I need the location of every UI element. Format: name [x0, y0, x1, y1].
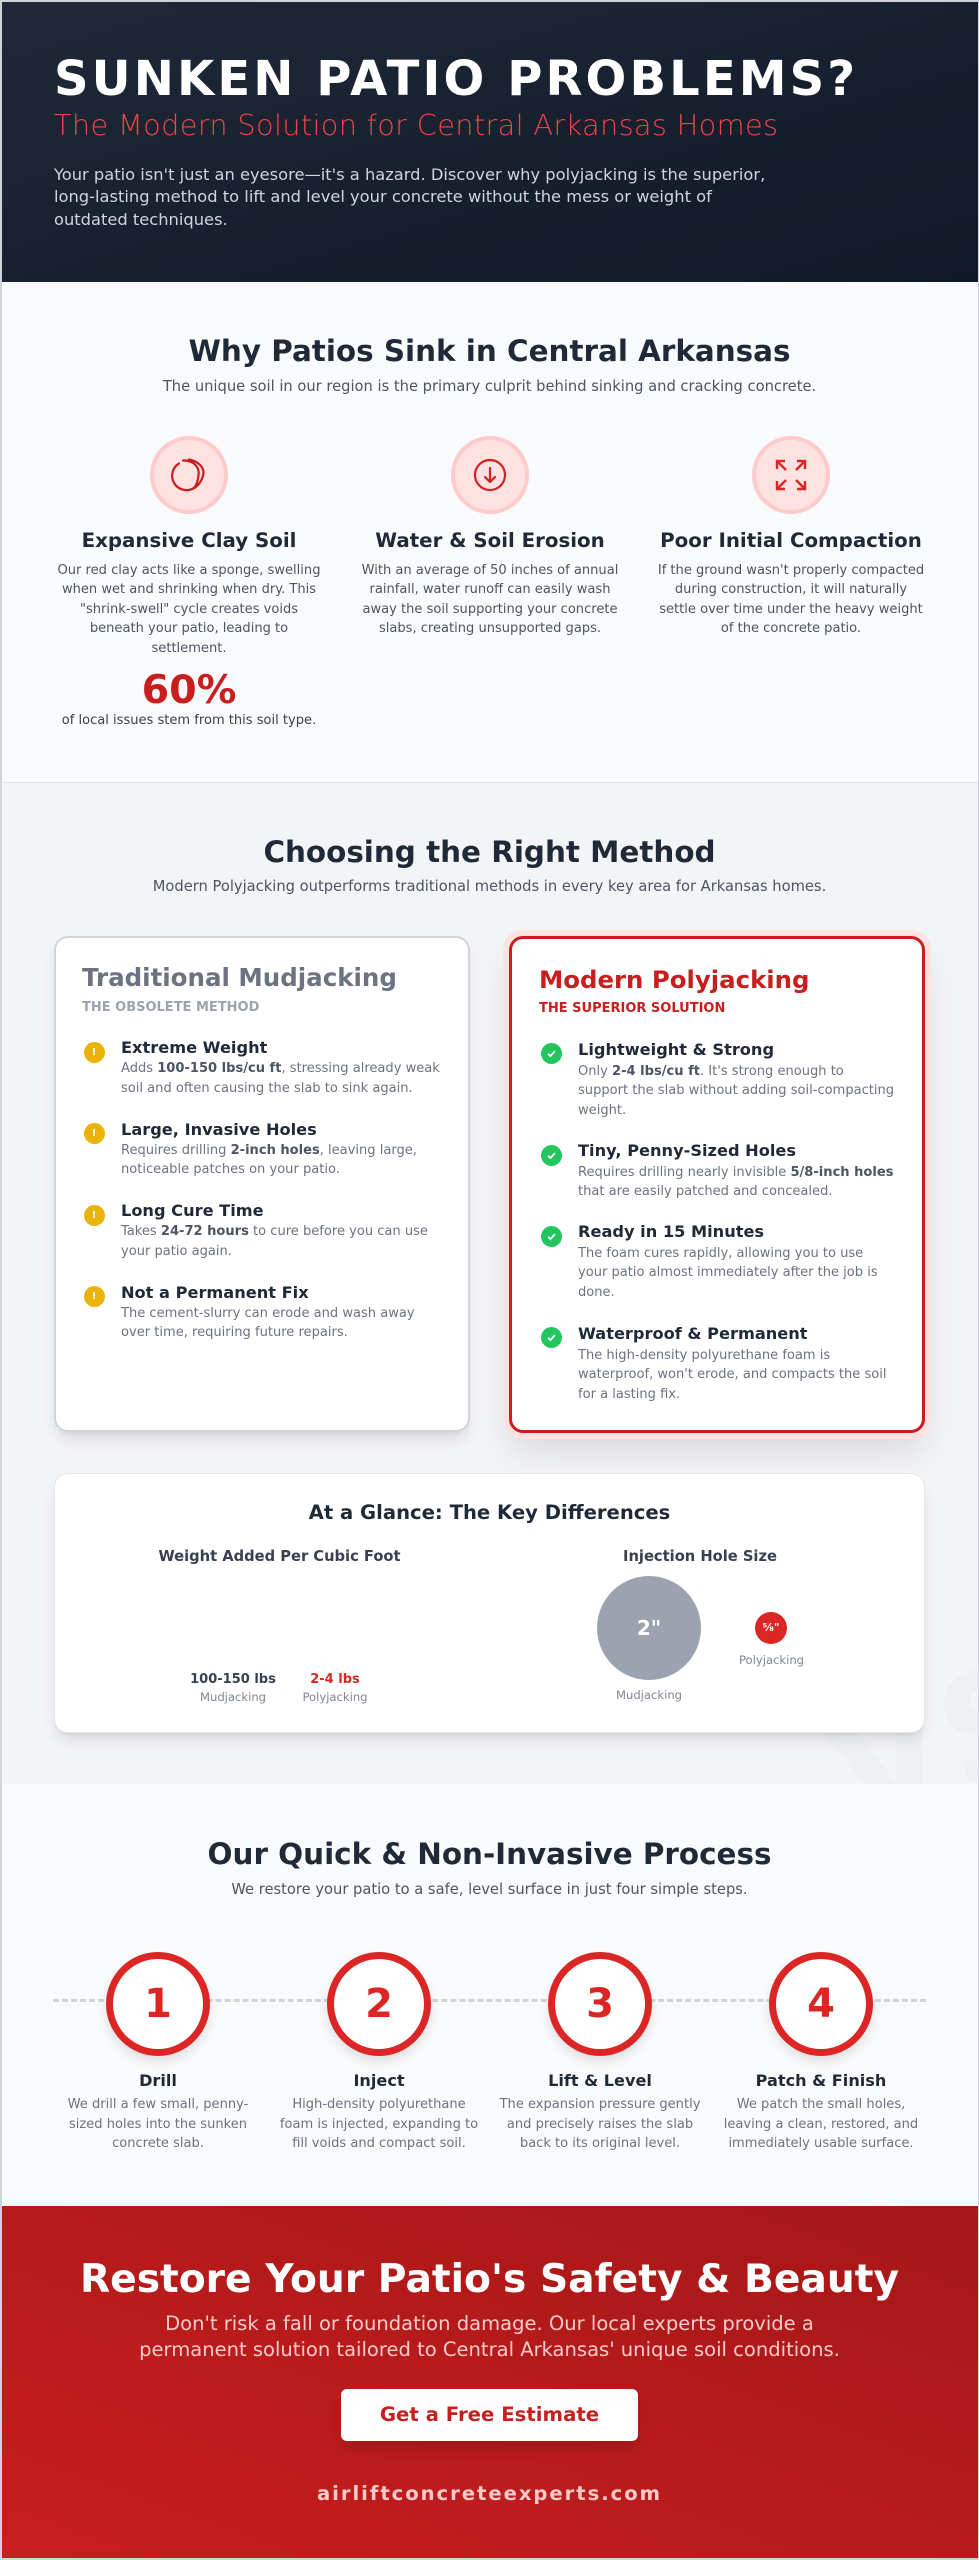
item text: soil and often causing the slab to sink again. [121, 1081, 413, 1096]
item title: Extreme Weight [121, 1038, 267, 1057]
cause text: erosion: rainfall, water runoff can easily wash [370, 582, 610, 597]
icon: expansive clay [150, 436, 228, 514]
cta paragraph: Don't risk a fall or foundation damage. Our local experts provide a [165, 2312, 814, 2335]
card title: Modern Polyjacking [539, 965, 810, 994]
subtitle: The Modern Solution for Central Arkansas Homes [54, 108, 778, 142]
cause heading: clay: Expansive Clay Soil [82, 528, 296, 552]
icon: check [541, 1226, 562, 1247]
cause text: clay: when wet and shrinking when dry. This [62, 582, 316, 597]
item text: support the slab without adding soil-compacting [578, 1083, 894, 1098]
section subheading: We restore your patio to a safe, level surface in just four simple steps. [231, 1880, 748, 1898]
step 3 text: and precisely raises the slab [507, 2117, 693, 2132]
step 4 text [724, 2097, 918, 2151]
item text: for a lasting fix. [578, 1386, 680, 1402]
step 2 text: foam is injected, expanding to [280, 2117, 478, 2132]
step 1 number: 1 [144, 1981, 172, 2027]
heading: Choosing the Right Method [263, 835, 716, 869]
intro paragraph: outdated techniques. [54, 210, 228, 229]
icon: warning [84, 1042, 104, 1062]
step 4 number: 4 [807, 1981, 835, 2027]
icon: check [541, 1144, 562, 1166]
item text: Requires drilling nearly invisible 5/8-inch holes [578, 1164, 893, 1180]
header panel [0, 0, 979, 282]
item title: Not a Permanent Fix [121, 1282, 309, 1302]
card tag: THE SUPERIOR SOLUTION [539, 1001, 725, 1016]
panel: call to action [0, 2206, 979, 2558]
item text [578, 1246, 878, 1300]
cause text: clay: settlement. [152, 641, 226, 656]
item text [578, 1164, 893, 1199]
intro paragraph: long-lasting method to lift and level your concrete without the mess or weight of [54, 187, 712, 206]
card tag: THE OBSOLETE METHOD [82, 1000, 259, 1015]
item text [121, 1061, 440, 1096]
cause text: compaction [658, 562, 924, 636]
step 1 number [106, 1952, 210, 2056]
step 3 title: Lift & Level [548, 2071, 652, 2090]
item text: The foam cures rapidly, allowing you to use [578, 1246, 863, 1260]
intro paragraph: Your patio isn't just an eyesore—it's a hazard. Discover why polyjacking is the superior, [54, 164, 765, 184]
hole: 2 inch: 2" [637, 1616, 661, 1640]
icon: warning [84, 1204, 104, 1226]
cta paragraph: permanent solution tailored to Central Arkansas' unique soil conditions. [139, 2338, 840, 2361]
icon: warning: ! [92, 1210, 96, 1220]
cause text: compaction: during construction, it will naturally [675, 582, 907, 597]
item title: Ready in 15 Minutes [578, 1222, 764, 1241]
item text [121, 1143, 417, 1177]
step 1 text [68, 2097, 248, 2151]
step 1 text: concrete slab. [112, 2136, 204, 2151]
hole caption: mudjacking: Mudjacking [616, 1688, 682, 1702]
icon: check [541, 1043, 562, 1064]
icon: poor compaction [752, 436, 830, 514]
item title: Long Cure Time [121, 1201, 264, 1220]
icon: warning: ! [92, 1046, 96, 1058]
card title: Traditional Mudjacking [82, 963, 397, 992]
step 3 number [548, 1952, 652, 2056]
item text: your patio again. [121, 1244, 232, 1259]
cause text: compaction: of the concrete patio. [721, 621, 861, 636]
cause heading: erosion: Water & Soil Erosion [375, 528, 605, 552]
hole: 5/8 inch: ⅝" [762, 1621, 780, 1634]
cause text: clay: Our red clay acts like a sponge, swelling [58, 562, 320, 578]
panel: at a glance comparison [54, 1473, 925, 1733]
card: modern polyjacking [509, 936, 925, 1433]
step 2 number [327, 1952, 431, 2056]
cause text: erosion: With an average of 50 inches of annual [362, 562, 618, 578]
step 2 text [280, 2097, 478, 2151]
step 3 text [500, 2097, 700, 2151]
item title: Large, Invasive Holes [121, 1120, 317, 1138]
item text: Takes 24-72 hours to cure before you can use [121, 1224, 428, 1239]
card: traditional mudjacking [54, 936, 470, 1432]
cause text: erosion: away the soil supporting your concrete [362, 602, 618, 617]
item text: done. [578, 1284, 615, 1300]
item text: Requires drilling 2-inch holes, leaving large, [121, 1143, 417, 1158]
step 4 text: immediately usable surface. [728, 2136, 914, 2151]
button [341, 2389, 638, 2441]
item title: Waterproof & Permanent [578, 1324, 808, 1342]
icon: warning: ! [92, 1291, 96, 1302]
stat caption: of local issues stem from this soil type. [62, 712, 316, 728]
cta paragraph [139, 2312, 840, 2361]
comparison heading: At a Glance: The Key Differences [309, 1501, 670, 1524]
connector line [53, 1999, 926, 2002]
item text: waterproof, won't erode, and compacts the soil [578, 1367, 887, 1382]
item title: Tiny, Penny-Sized Holes [578, 1140, 796, 1160]
stat: 60%: 60% [142, 667, 236, 713]
cause text: clay: beneath your patio, leading to [90, 621, 288, 636]
cta heading: Restore Your Patio's Safety & Beauty [80, 2256, 899, 2302]
hole: 5/8 inch [755, 1612, 787, 1644]
intro paragraph [54, 164, 765, 229]
chart label: polyjacking weight: 2-4 lbs [310, 1672, 360, 1686]
section subheading: The unique soil in our region is the primary culprit behind sinking and cracking concrete. [163, 378, 816, 394]
title: SUNKEN PATIO PROBLEMS? [54, 51, 858, 107]
step 1 title: Drill [139, 2071, 177, 2090]
hole caption: polyjacking: Polyjacking [739, 1653, 804, 1667]
item text [578, 1348, 887, 1402]
step 4 number [769, 1952, 873, 2056]
item text: your patio almost immediately after the job is [578, 1265, 878, 1280]
chart title: weight: Weight Added Per Cubic Foot [158, 1548, 401, 1565]
panel: choosing the right method [0, 783, 979, 1784]
item text: weight. [578, 1102, 626, 1118]
chart label: mudjacking weight: 100-150 lbs [190, 1672, 276, 1686]
cause text: erosion: slabs, creating unsupported gaps. [379, 621, 601, 636]
website url: airliftconcreteexperts.com [317, 2482, 662, 2505]
icon: warning [84, 1286, 104, 1307]
button: Get a Free Estimate [380, 2403, 599, 2426]
step 2 text: High-density polyurethane [292, 2097, 466, 2112]
item text: Adds 100-150 lbs/cu ft, stressing already weak [121, 1061, 440, 1076]
item text [120, 1306, 415, 1340]
step 3 text: The expansion pressure gently [500, 2097, 700, 2112]
item text [578, 1064, 894, 1118]
step 4 text: leaving a clean, restored, and [724, 2117, 918, 2132]
step 2 title: Inject [353, 2071, 405, 2090]
chart title: hole size: Injection Hole Size [623, 1548, 777, 1565]
step 4 title: Patch & Finish [756, 2071, 886, 2090]
item text: noticeable patches on your patio. [121, 1162, 340, 1177]
item title: Lightweight & Strong [578, 1040, 774, 1058]
cause text: clay: "shrink-swell" cycle creates voids [80, 602, 298, 617]
step 1 text: We drill a few small, penny- [68, 2097, 248, 2112]
cause text: compaction: If the ground wasn't properly compacted [658, 562, 924, 578]
cause text: clay [58, 562, 320, 656]
hole: 2 inch [597, 1576, 701, 1680]
step 2 number: 2 [365, 1981, 393, 2027]
step 2 text: fill voids and compact soil. [292, 2136, 466, 2151]
step 3 text: back to its original level. [520, 2136, 680, 2151]
cause text: compaction: settle over time under the heavy weight [659, 602, 923, 617]
section subheading: Modern Polyjacking outperforms traditional methods in every key area for Arkansas homes. [153, 878, 826, 895]
heading: Our Quick & Non-Invasive Process [208, 1836, 771, 1870]
icon: check [541, 1327, 562, 1348]
item text: that are easily patched and concealed. [578, 1184, 833, 1199]
panel: process [0, 1784, 979, 2206]
item text: Only 2-4 lbs/cu ft. It's strong enough to [578, 1064, 844, 1078]
heading: Why Patios Sink in Central Arkansas [188, 334, 790, 368]
cause text: erosion [362, 562, 618, 636]
icon: warning: ! [92, 1128, 96, 1139]
item text: The high-density polyurethane foam is [578, 1348, 830, 1362]
step 1 text: sized holes into the sunken [69, 2117, 247, 2132]
chart caption: mudjacking: Mudjacking [200, 1690, 266, 1704]
step 3 number: 3 [586, 1981, 614, 2027]
chart caption: polyjacking: Polyjacking [302, 1690, 368, 1704]
cause heading: compaction: Poor Initial Compaction [660, 528, 922, 552]
icon: warning [84, 1123, 104, 1144]
panel: why patios sink [0, 282, 979, 783]
step 4 text: We patch the small holes, [737, 2097, 905, 2112]
item text [120, 1224, 428, 1259]
item text: The cement-slurry can erode and wash away [121, 1306, 415, 1321]
item text: over time, requiring future repairs. [121, 1325, 348, 1340]
icon: water erosion [451, 436, 529, 514]
